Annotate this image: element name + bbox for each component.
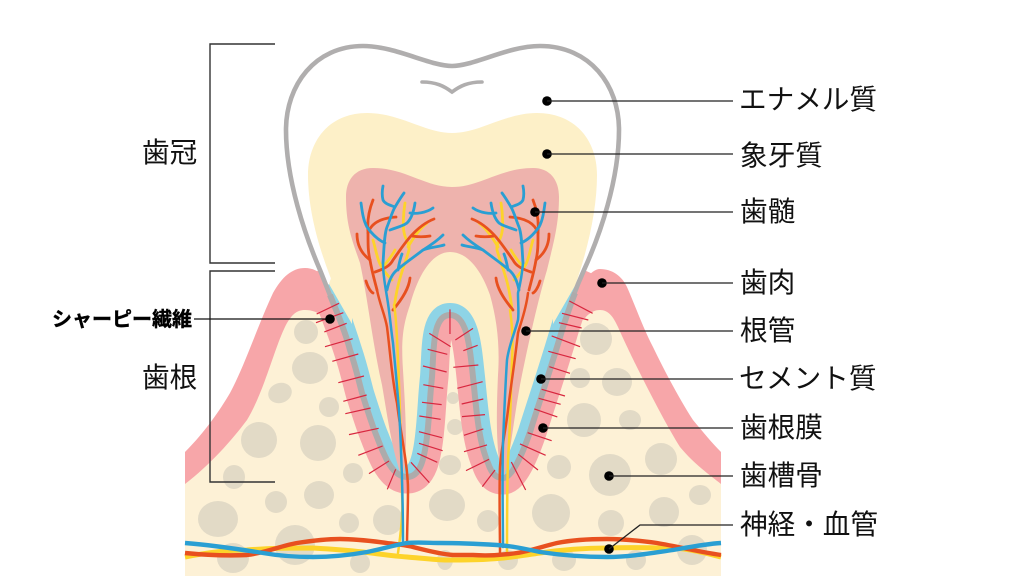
bracket: root (210, 271, 275, 482)
bracket: crown (210, 44, 275, 263)
label: crown: 歯冠 (142, 137, 197, 168)
callout: enamel (542, 84, 877, 115)
nerves and vessels in bone (185, 539, 721, 560)
callout: dentin (542, 140, 823, 171)
callout: cementum (536, 363, 876, 394)
callout: enamel: エナメル質 (739, 84, 877, 115)
tooth (286, 46, 619, 500)
callout: nerves and blood vessels (604, 509, 878, 554)
gum tissue (185, 268, 721, 500)
callout: Sharpey's fibers: シャーピー繊維 (52, 308, 192, 331)
callout: nerves and blood vessels: 神経・血管 (740, 509, 878, 540)
callout: alveolar bone (604, 460, 823, 491)
callout: periodontal ligament (538, 412, 823, 443)
callout: pulp: 歯髄 (740, 196, 795, 227)
callout: cementum: セメント質 (739, 363, 876, 394)
callout: gum: 歯肉 (740, 267, 795, 298)
callout: dentin: 象牙質 (740, 140, 823, 171)
callout: periodontal ligament: 歯根膜 (740, 412, 823, 443)
callout: root canal (521, 315, 795, 346)
callout: root canal: 根管 (740, 315, 795, 346)
callout: pulp (530, 196, 795, 227)
callout: alveolar bone: 歯槽骨 (740, 460, 823, 491)
label: root: 歯根 (142, 362, 197, 393)
Sharpey's fibers (316, 301, 593, 490)
callout: Sharpey's fibers (52, 308, 335, 331)
alveolar bone (185, 310, 721, 576)
periodontal ligament band (320, 270, 584, 478)
callout: gum (597, 267, 795, 298)
nerves and vessels in root canals (357, 186, 549, 557)
